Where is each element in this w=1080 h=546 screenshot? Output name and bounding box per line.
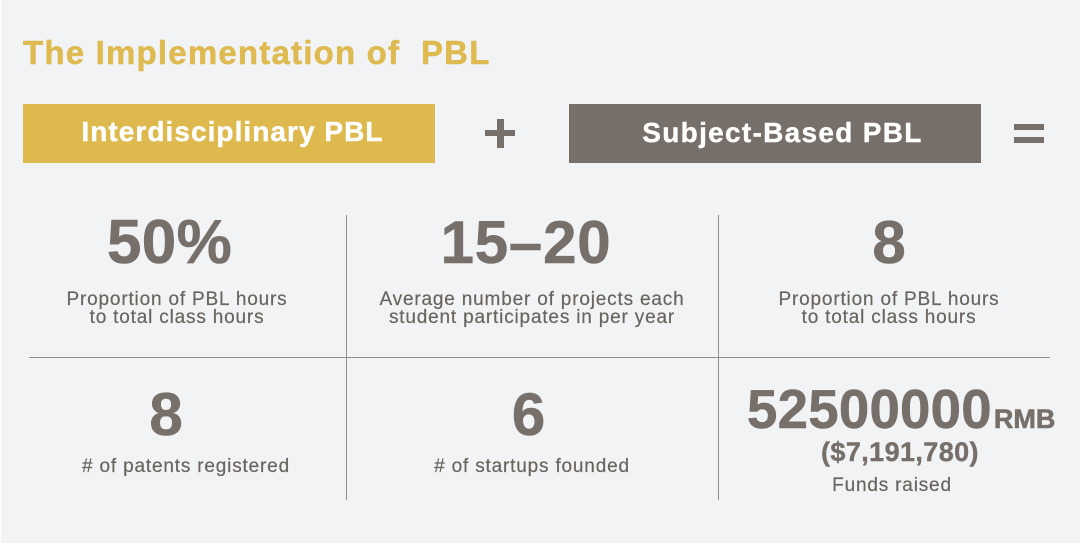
number: 52500000RMB bbox=[747, 379, 1055, 440]
stat: startups bbox=[434, 381, 630, 477]
caption: student participates in per year bbox=[389, 307, 675, 328]
caption: # of startups founded bbox=[434, 456, 630, 477]
caption: Proportion of PBL hours bbox=[779, 289, 999, 310]
USD amount: ($7,191,780) bbox=[821, 437, 979, 467]
box: Subject-Based PBL bbox=[569, 104, 981, 163]
caption bbox=[779, 289, 999, 328]
number: 8 bbox=[872, 209, 906, 276]
divider lines bbox=[346, 215, 347, 500]
caption: to total class hours bbox=[802, 307, 976, 328]
plus sign bbox=[485, 119, 515, 148]
box: Interdisciplinary PBL: Interdisciplinary PBL bbox=[81, 116, 384, 147]
caption: Funds raised bbox=[832, 475, 952, 496]
caption bbox=[380, 289, 684, 328]
caption bbox=[67, 289, 287, 328]
title: The Implementation of PBL bbox=[23, 34, 491, 71]
caption: Proportion of PBL hours bbox=[67, 289, 287, 310]
stat: 8 projects bbox=[779, 209, 999, 328]
stat: funds raised bbox=[747, 379, 1055, 496]
stat: 15-20 bbox=[380, 209, 684, 328]
caption: Average number of projects each bbox=[380, 289, 684, 310]
stat: patents bbox=[82, 381, 290, 477]
number: 6 bbox=[512, 381, 545, 448]
number: 50% bbox=[107, 208, 232, 277]
caption: # of patents registered bbox=[82, 456, 290, 477]
number: 8 bbox=[149, 381, 183, 448]
caption: to total class hours bbox=[90, 307, 264, 328]
number: 15–20 bbox=[441, 209, 611, 276]
equals sign bbox=[1014, 124, 1044, 143]
stat: 50% bbox=[67, 208, 287, 328]
box: Interdisciplinary PBL bbox=[23, 104, 435, 163]
box: Subject-Based PBL: Subject-Based PBL bbox=[642, 117, 923, 148]
